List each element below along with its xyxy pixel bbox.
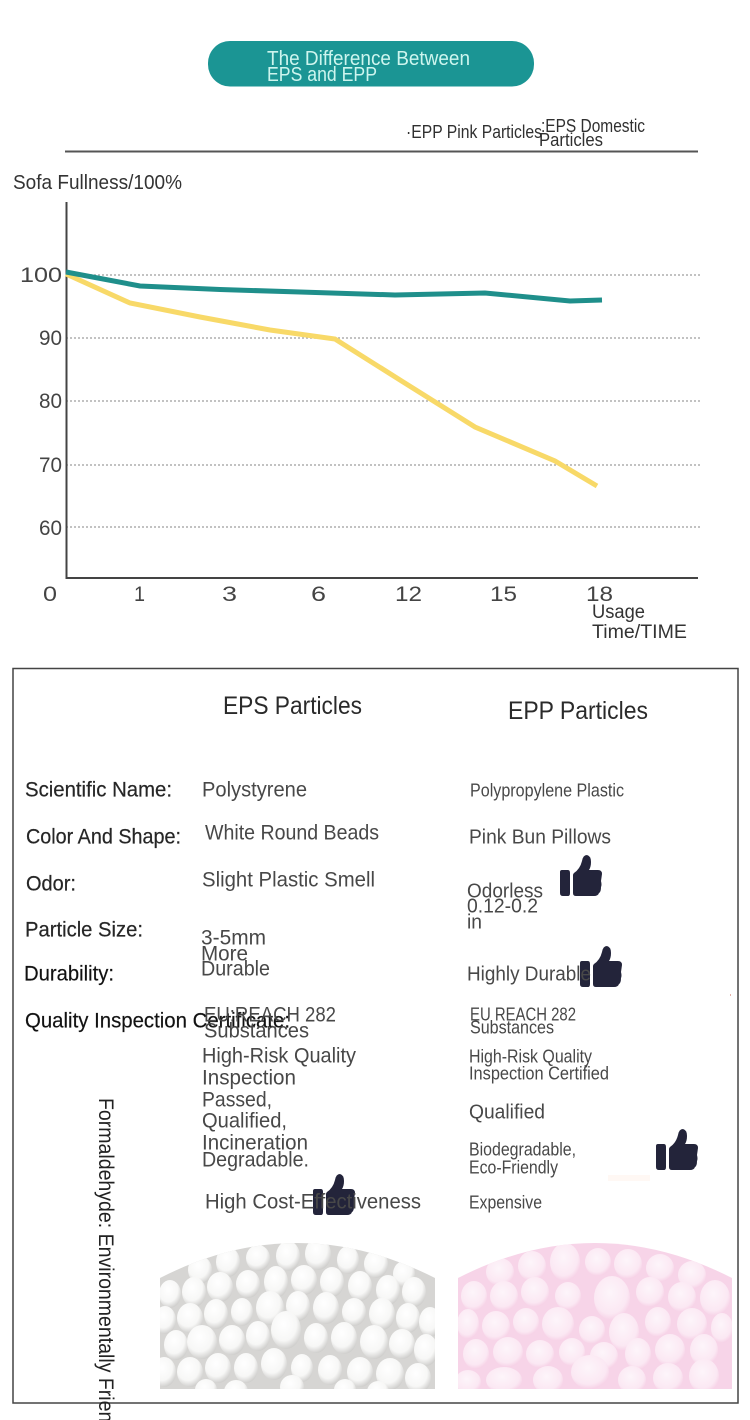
EPP column values <box>467 781 624 1213</box>
EPP column values: Odorless <box>467 880 543 903</box>
y axis ticks: 70 <box>39 454 62 477</box>
EPP column values: Pink Bun Pillows <box>469 826 611 849</box>
y axis ticks: 100 <box>20 264 62 287</box>
photo: pink EPP beads <box>455 1240 733 1394</box>
legend <box>406 116 645 150</box>
axes <box>66 202 698 578</box>
row labels: Odor: <box>26 873 76 896</box>
EPP column values: Highly Durable <box>467 963 591 986</box>
comparison panel <box>13 668 738 1420</box>
EPP column values: Qualified <box>469 1101 545 1124</box>
y axis title: Sofa Fullness/100% <box>13 172 182 194</box>
x axis title: Time/TIME <box>592 622 687 643</box>
EPS column values: Degradable. <box>202 1149 309 1172</box>
row labels: Scientific Name: <box>25 779 172 802</box>
icon: thumbs up, durable <box>580 946 622 987</box>
row labels: Durability: <box>24 963 114 986</box>
EPS column values: EU:REACH 282 <box>204 1004 336 1027</box>
y axis ticks: 80 <box>39 390 62 413</box>
icon: thumbs up, odorless <box>560 855 602 896</box>
line chart <box>13 172 700 643</box>
x axis ticks: 0 <box>43 583 57 606</box>
EPS column values: High-Risk Quality <box>202 1045 356 1068</box>
EPS column values: Qualified, <box>202 1110 287 1133</box>
EPP column values: Polypropylene Plastic <box>470 781 624 801</box>
EPS column values: Incineration <box>202 1132 308 1155</box>
EPS column values: Substances <box>204 1020 309 1043</box>
EPS column values: More <box>201 943 248 966</box>
x axis ticks: 1 <box>134 583 145 606</box>
EPS column values: 3-5mm <box>201 927 266 950</box>
column heading: EPP: EPP Particles <box>508 697 648 725</box>
EPP column values: 0.12-0.2 <box>467 895 538 918</box>
EPP column values: Biodegradable, <box>469 1140 576 1160</box>
EPS column values: White Round Beads <box>205 822 379 845</box>
cost label: EPS: High Cost-Effectiveness <box>205 1191 421 1214</box>
legend: ·EPP Pink Particles <box>406 122 542 142</box>
column heading: EPS: EPS Particles <box>223 692 362 720</box>
title pill: EPS and EPP <box>267 64 377 86</box>
EPP column values: in <box>467 911 482 934</box>
icon: thumbs up, cost <box>313 1174 355 1215</box>
y axis ticks <box>20 264 62 540</box>
y axis ticks: 60 <box>39 517 62 540</box>
row labels: Quality Inspection Certificate: <box>25 1010 290 1033</box>
EPP column values: Expensive <box>469 1193 542 1213</box>
yellow EPS line <box>66 274 597 486</box>
EPP column values: EU REACH 282 <box>470 1005 576 1025</box>
legend: :EPS Domestic <box>541 116 645 136</box>
EPP column values: Eco-Friendly <box>469 1158 558 1178</box>
row labels <box>24 779 290 1033</box>
legend: Particles <box>539 130 603 150</box>
row labels: Particle Size: <box>25 919 143 942</box>
EPP column values: Substances <box>470 1018 554 1038</box>
x axis ticks: 18 <box>586 583 613 606</box>
row labels: Color And Shape: <box>26 826 181 849</box>
x axis ticks <box>43 583 613 606</box>
y axis ticks: 90 <box>39 327 62 350</box>
EPS column values: Durable <box>201 958 270 981</box>
x axis ticks: 12 <box>395 583 422 606</box>
title pill: The Difference Between <box>267 48 470 70</box>
x axis ticks: 15 <box>490 583 517 606</box>
x axis ticks: 3 <box>222 583 237 606</box>
x axis ticks: 6 <box>311 583 326 606</box>
EPS column values: Inspection <box>202 1067 296 1090</box>
title pill <box>208 41 534 86</box>
x axis title: Usage <box>592 602 645 623</box>
EPS column values: Polystyrene <box>202 779 307 802</box>
EPS column values: Slight Plastic Smell <box>202 869 375 892</box>
EPP column values: High-Risk Quality <box>469 1047 592 1067</box>
photo: white EPS beads <box>160 1243 435 1389</box>
EPP column values: Inspection Certified <box>469 1064 609 1084</box>
x axis title <box>592 602 687 643</box>
EPS column values <box>201 779 379 1172</box>
EPS column values: Passed, <box>202 1089 272 1112</box>
green EPP line <box>66 272 602 301</box>
icon: thumbs up, eco-friendly <box>656 1129 698 1170</box>
